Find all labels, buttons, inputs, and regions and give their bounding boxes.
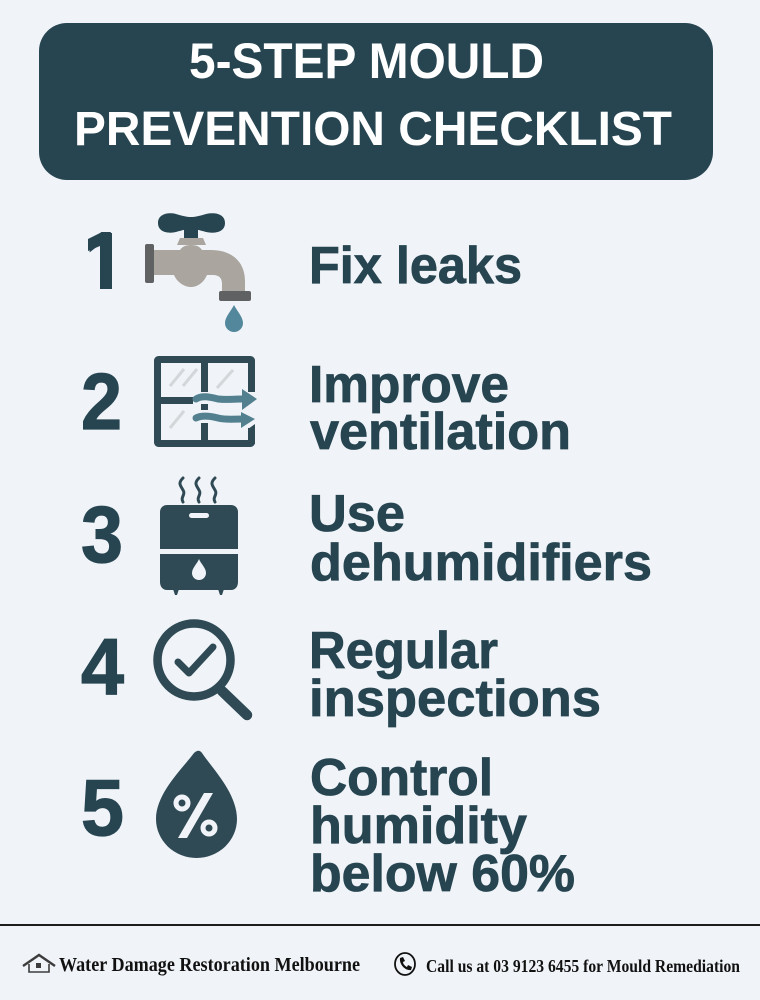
title banner	[39, 23, 713, 180]
icon: window with airflow	[157, 358, 257, 444]
footer: company: Water Damage Restoration Melbourne	[59, 954, 360, 976]
step 5 label	[310, 749, 575, 903]
icon: water drop with percent	[156, 751, 237, 858]
icon: dripping tap	[145, 213, 251, 332]
step 4 label: Regular	[309, 622, 498, 680]
step 3 label: dehumidifiers	[310, 534, 652, 592]
step 3 number: 3	[81, 490, 123, 579]
step 4 label: inspections	[309, 670, 601, 728]
step 5: control humidity	[81, 749, 575, 903]
step 1 label: Fix leaks	[309, 237, 522, 295]
step 2 label	[309, 356, 571, 461]
step 1: fix leaks	[82, 213, 522, 332]
step 5 label: below 60%	[310, 845, 575, 903]
step 3 label	[309, 485, 652, 592]
title banner: PREVENTION CHECKLIST	[74, 103, 672, 156]
icon: dehumidifier	[160, 478, 238, 595]
step 4 number: 4	[81, 622, 124, 711]
step 4: regular inspections	[81, 622, 601, 728]
step 1 number: 1	[86, 216, 122, 305]
icon: magnifying glass with check	[158, 624, 247, 715]
step 3 label: Use	[309, 485, 405, 543]
step 5 number: 5	[81, 763, 124, 852]
icon: house	[23, 955, 55, 972]
step 2 label: ventilation	[310, 403, 571, 461]
step 2: improve ventilation	[81, 356, 571, 461]
step 4 label	[309, 622, 601, 728]
step 5 label: humidity	[310, 797, 527, 855]
step 2 label: Improve	[309, 356, 509, 414]
step 5 label: Control	[310, 749, 493, 807]
step 3: use dehumidifiers	[81, 478, 652, 595]
step 2 number: 2	[81, 357, 122, 446]
icon: phone	[395, 953, 415, 975]
title banner: 5-STEP MOULD	[189, 33, 544, 89]
